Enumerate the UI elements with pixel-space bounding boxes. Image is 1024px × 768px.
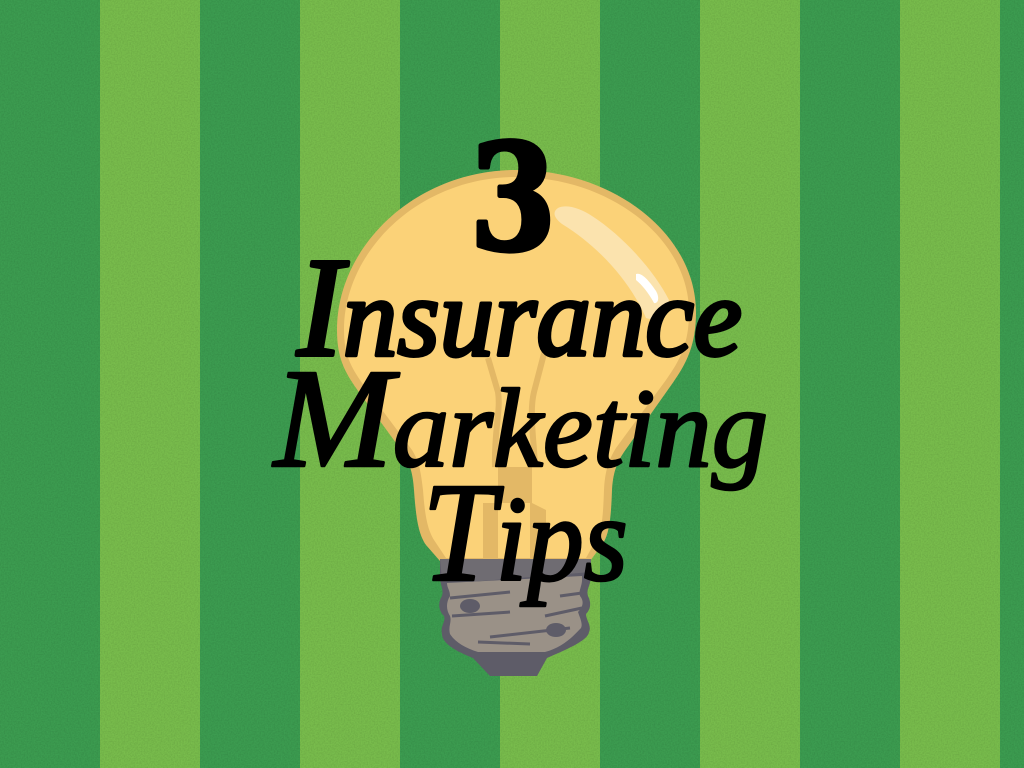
highlight (555, 206, 669, 319)
bulb glass (337, 170, 696, 561)
title line: Tips: Tips (422, 453, 628, 611)
title line: Marketing: Marketing (272, 339, 768, 497)
screw base (439, 559, 591, 676)
filament (488, 346, 546, 467)
icon: light bulb (337, 170, 696, 676)
title (272, 113, 768, 611)
number 3: 3 (470, 113, 556, 284)
title line: Insurance: Insurance (296, 228, 742, 386)
